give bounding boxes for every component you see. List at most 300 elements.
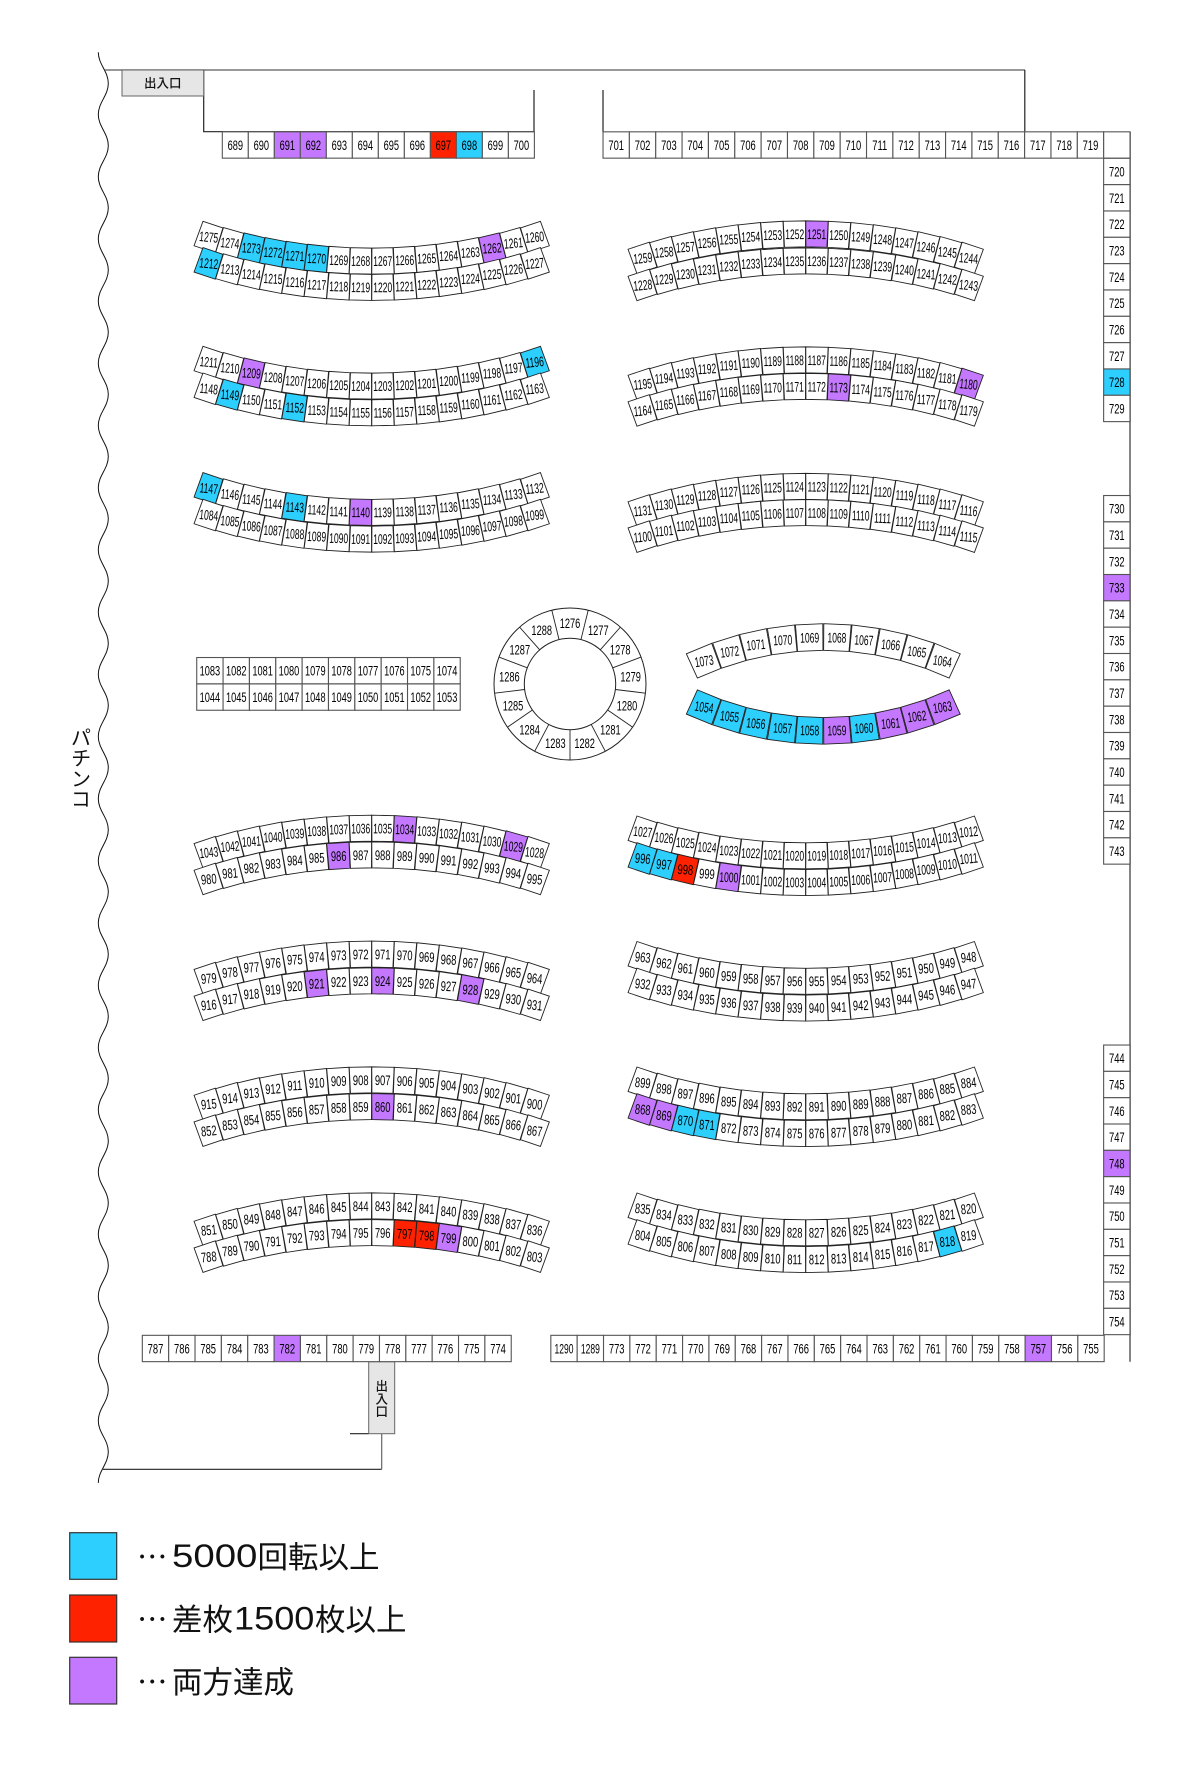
straight row: 689-700: 699 xyxy=(488,137,503,154)
arc block bottom row: 1212-1227: 1213 xyxy=(220,263,240,279)
straight row: 701-719: 707 xyxy=(766,137,782,154)
arc block top row: 1147-1132: 1140 xyxy=(351,506,370,521)
arc block bottom row: 1164-1179: 1179 xyxy=(959,404,978,420)
arc block bottom row: 868-883: 871 xyxy=(699,1116,716,1134)
legend xyxy=(70,1533,406,1704)
arc block top row: 1211-1196: 1198 xyxy=(482,367,502,382)
arc block bottom row: 1228-1243: 1242 xyxy=(937,272,957,288)
arc block top row: 1275-1260: 1261 xyxy=(503,236,524,252)
arc block top row: 851-836: 840 xyxy=(440,1203,457,1220)
arc block bottom row: 916-931: 917 xyxy=(222,990,239,1008)
arc row: 1073-1064: 1073 xyxy=(694,654,715,671)
arc block top row: 963-948: 949 xyxy=(939,955,956,972)
straight row: 701-719: 712 xyxy=(898,137,914,154)
arc block top row: 835-820: 827 xyxy=(809,1225,825,1241)
arc block bottom row: 852-867: 862 xyxy=(419,1101,435,1118)
arc block top row: 1211-1196: 1203 xyxy=(373,380,392,395)
arc block bottom row: 852-867: 852 xyxy=(200,1122,218,1140)
arc block bottom row: 1164-1179: 1169 xyxy=(741,383,760,398)
arc block bottom row: 804-819: 810 xyxy=(765,1250,781,1267)
arc block bottom row: 1228-1243: 1229 xyxy=(654,272,674,288)
arc block bottom row: 1212-1227: 1219 xyxy=(351,281,370,296)
arc block bottom row: 852-867: 855 xyxy=(265,1107,282,1124)
legend: 5000 spins: … xyxy=(137,1533,168,1577)
arc block top row: 851-836: 836 xyxy=(526,1221,543,1239)
arc block top row: 979-964: 975 xyxy=(287,951,303,968)
arc block top row: 899-884: 888 xyxy=(874,1093,891,1110)
arc block bottom row: 932-947: 943 xyxy=(874,994,891,1012)
arc block top row: 963-948: 951 xyxy=(896,964,913,981)
arc block bottom row: 868-883: 882 xyxy=(939,1107,956,1124)
straight row: 787-774 xyxy=(142,1335,511,1362)
column: 720-729: 721 xyxy=(1109,190,1125,206)
arc block bottom row: 996-1011: 1000 xyxy=(719,871,739,886)
arc block bottom row: 1100-1115: 1115 xyxy=(959,530,978,546)
straight row: 689-700: 690 xyxy=(254,137,269,154)
arc block bottom row: 1100-1115: 1113 xyxy=(917,519,935,535)
arc block bottom row: 1228-1243: 1241 xyxy=(916,267,936,283)
arc block top row: 1043-1028: 1042 xyxy=(220,840,240,856)
arc block top row: 1043-1028: 1039 xyxy=(285,827,305,843)
arc row: 1073-1064: 1067 xyxy=(854,634,874,649)
arc block top row: 1027-1012: 1025 xyxy=(675,836,695,852)
arc block top row: 1027-1012: 1016 xyxy=(873,844,892,859)
column: 720-729: 720 xyxy=(1109,164,1125,180)
straight row: 701-719: 702 xyxy=(635,137,651,154)
arc block top row: 851-836: 837 xyxy=(505,1216,522,1233)
arc block top row: 851-836: 838 xyxy=(484,1211,501,1228)
arc block top row: 851-836 xyxy=(194,1193,549,1246)
arc block top row: 979-964: 968 xyxy=(440,951,457,968)
arc block bottom row: 1148-1163: 1156 xyxy=(373,407,392,421)
arc block top row: 915-900: 915 xyxy=(200,1095,218,1113)
column: 730-743 xyxy=(1104,496,1130,864)
ring: 1276-1288: 1278 xyxy=(610,641,631,658)
arc block top row: 1259-1244: 1258 xyxy=(654,245,674,261)
arc block top row: 1043-1028: 1032 xyxy=(439,827,458,843)
arc block bottom row: 1084-1099: 1085 xyxy=(220,514,240,530)
flat block: 1083-1044: 1079 xyxy=(305,663,326,679)
flat block: 1083-1044: 1076 xyxy=(384,663,405,679)
column: 720-729: 723 xyxy=(1109,243,1125,259)
straight row: 1290-755: 761 xyxy=(925,1341,941,1357)
arc block bottom row: 980-995: 992 xyxy=(462,855,479,873)
straight row: 1290-755: 764 xyxy=(846,1341,862,1357)
arc block top row: 835-820: 832 xyxy=(699,1216,716,1233)
arc block top row: 1131-1116: 1124 xyxy=(785,481,804,495)
arc block top row: 1211-1196: 1201 xyxy=(417,377,436,392)
arc block top row: 1043-1028: 1028 xyxy=(524,846,545,862)
arc block bottom row: 1084-1099: 1094 xyxy=(417,530,437,545)
arc row: 1073-1064: 1064 xyxy=(932,654,953,671)
arc block bottom row: 1228-1243: 1239 xyxy=(873,260,892,275)
straight row: 701-719 xyxy=(603,132,1130,158)
arc block top row: 1275-1260: 1275 xyxy=(199,230,219,246)
arc row: 1054-1063: 1061 xyxy=(881,717,901,733)
arc block top row: 851-836: 851 xyxy=(200,1221,218,1239)
column: 744-754: 746 xyxy=(1109,1103,1125,1119)
column: 730-743: 739 xyxy=(1109,738,1125,754)
straight row: 1290-755: 1289 xyxy=(581,1343,600,1357)
arc block top row: 1259-1244: 1255 xyxy=(719,233,739,248)
arc block top row: 835-820: 830 xyxy=(743,1222,759,1239)
arc block top row: 979-964: 972 xyxy=(353,946,369,963)
arc block bottom row: 996-1011: 1006 xyxy=(851,874,870,889)
arc block bottom row: 1228-1243 xyxy=(628,248,983,301)
arc block top row: 851-836: 846 xyxy=(309,1201,325,1217)
arc block top row: 899-884 xyxy=(628,1067,983,1120)
arc block bottom row: 996-1011: 1011 xyxy=(959,852,979,868)
arc block bottom row: 804-819: 815 xyxy=(874,1246,891,1263)
arc block bottom row: 1148-1163: 1153 xyxy=(307,404,326,419)
arc block bottom row: 1164-1179: 1175 xyxy=(873,385,892,401)
arc block top row: 1211-1196: 1197 xyxy=(504,361,523,377)
arc block top row: 1211-1196: 1210 xyxy=(220,361,240,377)
ring: 1276-1288: 1284 xyxy=(519,722,540,738)
ring: 1276-1288: 1280 xyxy=(617,698,638,714)
legend: both achieved: 両方達成 xyxy=(172,1666,294,1700)
straight row: 701-719: 710 xyxy=(846,137,861,154)
straight row: 689-700: 697 xyxy=(436,137,451,154)
arc block top row: 1147-1132: 1138 xyxy=(395,505,414,520)
arc block top row: 1195-1180: 1183 xyxy=(895,362,914,378)
arc block top row: 1131-1116: 1118 xyxy=(917,493,935,509)
straight row: 1290-755: 768 xyxy=(741,1341,757,1357)
arc block top row: 1211-1196: 1205 xyxy=(329,379,348,394)
arc block top row: 1195-1180: 1195 xyxy=(633,377,653,393)
arc block bottom row: 1228-1243: 1230 xyxy=(676,267,695,283)
arc block top row: 1259-1244: 1251 xyxy=(807,228,826,243)
arc block bottom row: 980-995: 980 xyxy=(200,870,218,888)
arc block top row: 979-964: 974 xyxy=(309,949,325,966)
arc block top row: 1131-1116: 1123 xyxy=(807,481,826,495)
arc block bottom row: 916-931: 929 xyxy=(484,985,501,1003)
arc block bottom row: 788-803: 801 xyxy=(484,1237,501,1255)
arc block bottom row: 980-995: 988 xyxy=(375,847,391,864)
arc row: 1054-1063: 1057 xyxy=(773,722,792,737)
arc block top row: 835-820: 826 xyxy=(831,1224,847,1240)
arc block top row: 1043-1028 xyxy=(194,815,549,868)
straight row: 701-719: 713 xyxy=(925,137,941,154)
arc block bottom row: 916-931: 926 xyxy=(419,975,435,992)
arc block bottom row: 868-883: 872 xyxy=(721,1120,737,1137)
arc block bottom row: 996-1011: 1002 xyxy=(763,875,782,890)
arc block top row: 835-820: 834 xyxy=(655,1206,673,1224)
arc block top row: 1275-1260: 1264 xyxy=(439,249,459,265)
arc block bottom row: 980-995: 981 xyxy=(222,864,239,882)
arc block top row: 851-836: 849 xyxy=(243,1211,260,1228)
arc block bottom row: 1164-1179: 1174 xyxy=(851,383,870,398)
straight row: 701-719: 715 xyxy=(977,137,993,154)
top entrance xyxy=(122,70,204,96)
flat block: 1083-1044: 1045 xyxy=(226,689,247,706)
arc block bottom row: 852-867: 866 xyxy=(505,1116,522,1134)
arc block bottom row: 1148-1163: 1158 xyxy=(417,404,436,419)
arc block top row: 1211-1196: 1208 xyxy=(263,371,283,386)
arc block bottom row: 1164-1179: 1170 xyxy=(763,381,782,396)
column: 744-754: 754 xyxy=(1109,1314,1125,1330)
arc block top row: 851-836: 843 xyxy=(375,1198,391,1215)
straight row: 1290-755: 763 xyxy=(872,1341,888,1357)
arc row: 1073-1064 xyxy=(686,624,960,678)
arc block bottom row: 1228-1243: 1236 xyxy=(807,255,826,270)
arc block top row: 835-820: 821 xyxy=(939,1206,956,1224)
flat block: 1083-1044: 1047 xyxy=(279,689,299,706)
column: 744-754: 751 xyxy=(1109,1235,1125,1251)
arc block top row: 899-884: 895 xyxy=(721,1093,737,1110)
arc block top row: 1043-1028: 1038 xyxy=(307,825,326,840)
arc block bottom row: 932-947: 935 xyxy=(699,991,716,1008)
column: 744-754: 753 xyxy=(1109,1287,1125,1304)
arc block top row: 835-820: 824 xyxy=(874,1219,891,1236)
arc block bottom row: 788-803: 793 xyxy=(309,1227,325,1244)
arc block top row: 1027-1012: 1018 xyxy=(829,849,848,864)
arc block top row: 851-836: 841 xyxy=(419,1201,435,1217)
arc block top row: 1027-1012: 1020 xyxy=(785,850,804,864)
straight row: 787-774: 779 xyxy=(358,1341,374,1357)
straight row: 787-774: 776 xyxy=(438,1341,453,1357)
straight row: 787-774: 781 xyxy=(306,1341,322,1357)
column: 720-729 xyxy=(1104,158,1130,422)
arc block bottom row: 1100-1115: 1103 xyxy=(698,515,717,531)
arc block top row: 915-900: 901 xyxy=(505,1090,522,1107)
arc block bottom row: 916-931: 930 xyxy=(505,990,522,1008)
column: 720-729: 729 xyxy=(1109,401,1125,417)
arc block bottom row: 980-995: 983 xyxy=(265,855,282,873)
arc block bottom row: 916-931: 919 xyxy=(265,981,282,999)
arc block bottom row: 852-867: 861 xyxy=(397,1100,413,1116)
arc block bottom row: 1212-1227: 1223 xyxy=(439,276,458,291)
arc block bottom row: 868-883: 870 xyxy=(677,1112,694,1129)
arc block bottom row: 868-883: 874 xyxy=(765,1124,781,1141)
arc block bottom row: 996-1011: 997 xyxy=(655,856,673,874)
straight row: 1290-755: 765 xyxy=(820,1341,836,1357)
arc block bottom row: 1164-1179: 1165 xyxy=(654,398,674,414)
arc block top row: 1211-1196: 1202 xyxy=(395,379,414,394)
column: 744-754 xyxy=(1104,1045,1130,1335)
flat block: 1083-1044: 1049 xyxy=(331,689,352,706)
arc block bottom row: 804-819: 812 xyxy=(809,1251,825,1268)
straight row: 689-700: 689 xyxy=(228,137,243,154)
arc block bottom row: 1212-1227: 1216 xyxy=(285,276,305,291)
arc block top row: 1131-1116: 1120 xyxy=(873,485,892,501)
arc block bottom row: 788-803: 796 xyxy=(375,1225,391,1241)
arc block top row: 1195-1180: 1180 xyxy=(959,377,978,393)
flat block: 1083-1044: 1044 xyxy=(200,689,220,706)
arc block bottom row: 1100-1115: 1102 xyxy=(676,519,695,535)
straight row: 689-700: 698 xyxy=(462,137,477,154)
ring: 1276-1288: 1288 xyxy=(531,622,552,639)
ring: 1276-1288: 1282 xyxy=(574,735,595,752)
arc block top row: 1259-1244: 1246 xyxy=(916,240,936,256)
arc block top row: 1195-1180: 1185 xyxy=(851,357,870,372)
arc block top row: 915-900: 912 xyxy=(265,1080,282,1098)
straight row: 701-719: 714 xyxy=(951,137,967,154)
flat block: 1083-1044: 1051 xyxy=(384,689,405,706)
arc block bottom row: 868-883: 873 xyxy=(743,1123,759,1139)
arc block bottom row: 1212-1227: 1226 xyxy=(503,263,524,279)
arc block bottom row: 996-1011: 1008 xyxy=(895,867,914,883)
arc block top row: 1027-1012: 1015 xyxy=(895,841,914,856)
straight row: 787-774: 784 xyxy=(227,1341,243,1357)
arc block top row: 963-948: 950 xyxy=(918,960,935,977)
column: 730-743: 731 xyxy=(1109,527,1125,544)
arc block bottom row: 1212-1227 xyxy=(194,247,549,300)
arc block top row: 963-948: 948 xyxy=(960,949,977,966)
arc block top row: 899-884: 893 xyxy=(765,1098,781,1114)
straight row: 787-774: 774 xyxy=(490,1341,506,1357)
column: 730-743: 735 xyxy=(1109,632,1125,649)
arc block top row: 1131-1116: 1128 xyxy=(698,489,717,504)
straight row: 689-700: 694 xyxy=(358,137,373,154)
arc block top row: 899-884: 890 xyxy=(831,1098,847,1114)
arc block bottom row: 852-867: 856 xyxy=(287,1104,303,1121)
arc block bottom row: 1148-1163 xyxy=(194,373,549,426)
legend: coin difference xyxy=(70,1595,406,1642)
arc row: 1054-1063: 1058 xyxy=(800,724,819,739)
arc block bottom row: 788-803: 799 xyxy=(440,1230,457,1247)
arc row: 1073-1064: 1069 xyxy=(800,632,819,646)
arc block top row: 1027-1012 xyxy=(628,816,983,869)
arc block top row: 1131-1116: 1117 xyxy=(938,498,957,514)
arc block bottom row: 980-995: 985 xyxy=(309,850,325,866)
arc block top row: 1043-1028: 1040 xyxy=(263,831,283,846)
flat block: 1083-1044: 1083 xyxy=(200,663,220,679)
arc block bottom row: 1084-1099: 1097 xyxy=(482,520,502,535)
arc block bottom row: 932-947: 941 xyxy=(831,999,847,1016)
straight row: 787-774: 783 xyxy=(253,1341,269,1357)
arc block top row: 835-820: 823 xyxy=(896,1216,913,1233)
ring: 1276-1288: 1286 xyxy=(499,669,520,685)
arc block top row: 963-948: 960 xyxy=(699,964,716,981)
ring: 1276-1288: 1277 xyxy=(588,622,609,639)
arc block bottom row: 996-1011: 1005 xyxy=(829,875,848,890)
arc block top row: 1147-1132: 1139 xyxy=(373,506,392,521)
straight row: 787-774: 775 xyxy=(464,1341,480,1357)
straight row: 1290-755: 1290 xyxy=(555,1343,573,1357)
arc block bottom row: 804-819: 807 xyxy=(699,1242,716,1260)
arc block top row: 979-964: 979 xyxy=(200,970,218,987)
arc block top row: 915-900: 910 xyxy=(309,1075,325,1091)
arc block bottom row: 932-947: 940 xyxy=(809,1000,825,1016)
arc block bottom row: 932-947 xyxy=(628,968,983,1021)
arc block bottom row: 932-947: 934 xyxy=(677,986,694,1004)
arc block top row: 915-900: 905 xyxy=(419,1075,435,1091)
arc block top row: 1211-1196: 1206 xyxy=(307,377,326,392)
arc block top row: 963-948: 963 xyxy=(634,949,652,966)
straight row: 787-774: 786 xyxy=(174,1341,190,1357)
straight row: 1290-755: 769 xyxy=(714,1341,730,1357)
arc block top row: 1211-1196: 1211 xyxy=(199,355,218,371)
arc row: 1054-1063: 1063 xyxy=(932,700,953,717)
column: 730-743: 738 xyxy=(1109,711,1125,728)
arc block bottom row: 788-803: 790 xyxy=(243,1237,260,1255)
arc block top row: 1259-1244: 1248 xyxy=(873,233,892,248)
arc block bottom row: 1148-1163: 1149 xyxy=(220,388,240,404)
arc row: 1073-1064: 1070 xyxy=(773,634,793,649)
straight row: 1290-755: 766 xyxy=(793,1341,809,1357)
arc block top row: 1147-1132: 1143 xyxy=(285,501,304,516)
arc block bottom row: 788-803 xyxy=(194,1220,549,1273)
arc block bottom row: 1164-1179: 1166 xyxy=(676,393,695,409)
arc block bottom row: 804-819: 817 xyxy=(918,1238,935,1255)
straight row: 689-700: 696 xyxy=(410,137,425,154)
arc block top row: 1043-1028: 1036 xyxy=(351,822,370,837)
arc block top row: 899-884: 887 xyxy=(896,1090,913,1107)
arc block bottom row: 1148-1163: 1150 xyxy=(242,393,261,409)
arc block bottom row: 804-819: 814 xyxy=(853,1249,869,1265)
arc block bottom row: 1100-1115: 1110 xyxy=(852,509,870,524)
bottom entrance: 口 xyxy=(375,1405,388,1419)
arc block bottom row: 916-931: 924 xyxy=(375,973,391,990)
arc block bottom row: 932-947: 936 xyxy=(721,994,737,1012)
arc block top row: 1131-1116: 1126 xyxy=(741,483,760,498)
arc block top row: 1275-1260: 1271 xyxy=(285,249,305,265)
arc block top row: 963-948: 958 xyxy=(743,970,759,987)
arc block top row: 1195-1180: 1182 xyxy=(916,366,936,382)
straight row: 689-700 xyxy=(222,132,534,158)
arc block bottom row: 1148-1163: 1157 xyxy=(395,406,414,421)
arc row: 1073-1064: 1068 xyxy=(827,632,846,646)
arc block top row: 1027-1012: 1019 xyxy=(807,850,826,864)
arc block top row: 963-948: 957 xyxy=(765,972,781,989)
arc block bottom row: 1100-1115: 1114 xyxy=(938,524,957,540)
bottom entrance: 出 xyxy=(375,1380,388,1394)
arc block top row: 851-836: 848 xyxy=(265,1206,282,1224)
arc block bottom row: 1164-1179: 1171 xyxy=(785,381,804,395)
arc block bottom row: 932-947: 947 xyxy=(960,975,977,993)
arc block top row: 835-820: 822 xyxy=(918,1211,935,1229)
arc block bottom row: 1100-1115: 1109 xyxy=(829,508,848,522)
arc block top row: 1259-1244: 1247 xyxy=(894,236,914,252)
arc block bottom row: 788-803: 794 xyxy=(331,1226,347,1242)
column: 744-754: 744 xyxy=(1109,1050,1125,1067)
arc block top row: 915-900: 907 xyxy=(375,1072,391,1089)
arc block top row: 979-964: 964 xyxy=(526,970,543,987)
arc block top row: 915-900: 906 xyxy=(397,1073,413,1090)
arc block top row: 979-964: 971 xyxy=(375,946,391,963)
arc block bottom row: 852-867: 863 xyxy=(440,1104,457,1121)
straight row: 787-774: 778 xyxy=(385,1341,401,1357)
column: 720-729: 722 xyxy=(1109,216,1125,233)
straight row: 1290-755: 772 xyxy=(635,1341,651,1357)
arc block bottom row: 852-867: 854 xyxy=(243,1111,260,1129)
arc block top row: 835-820: 829 xyxy=(765,1224,781,1240)
ring: 1276-1288: 1287 xyxy=(510,641,530,658)
arc block top row: 1259-1244: 1254 xyxy=(741,230,761,246)
arc block bottom row: 916-931: 927 xyxy=(440,978,457,995)
arc block top row: 1275-1260 xyxy=(194,221,549,274)
arc block top row: 1147-1132: 1133 xyxy=(504,488,523,504)
arc block top row: 835-820: 820 xyxy=(960,1200,977,1218)
arc block top row: 1275-1260: 1265 xyxy=(417,252,436,267)
arc block bottom row: 932-947: 944 xyxy=(896,991,913,1008)
arc block bottom row: 1148-1163: 1154 xyxy=(329,406,348,421)
arc block top row: 1195-1180: 1184 xyxy=(873,359,892,374)
arc block bottom row: 996-1011: 999 xyxy=(699,865,716,883)
arc block bottom row: 788-803: 800 xyxy=(462,1233,479,1250)
arc block bottom row: 1148-1163: 1163 xyxy=(525,382,545,398)
arc block top row: 851-836: 839 xyxy=(462,1206,479,1224)
arc block bottom row: 1100-1115: 1111 xyxy=(874,512,891,527)
arc block top row: 1131-1116: 1125 xyxy=(763,481,782,496)
arc block bottom row: 804-819: 806 xyxy=(677,1238,694,1255)
column: 720-729: 725 xyxy=(1109,295,1125,312)
arc block bottom row: 1228-1243: 1235 xyxy=(785,255,804,270)
arc block bottom row: 980-995: 994 xyxy=(505,865,522,882)
arc block top row: 1259-1244: 1257 xyxy=(676,240,695,256)
flat block: 1083-1044: 1053 xyxy=(437,689,458,706)
